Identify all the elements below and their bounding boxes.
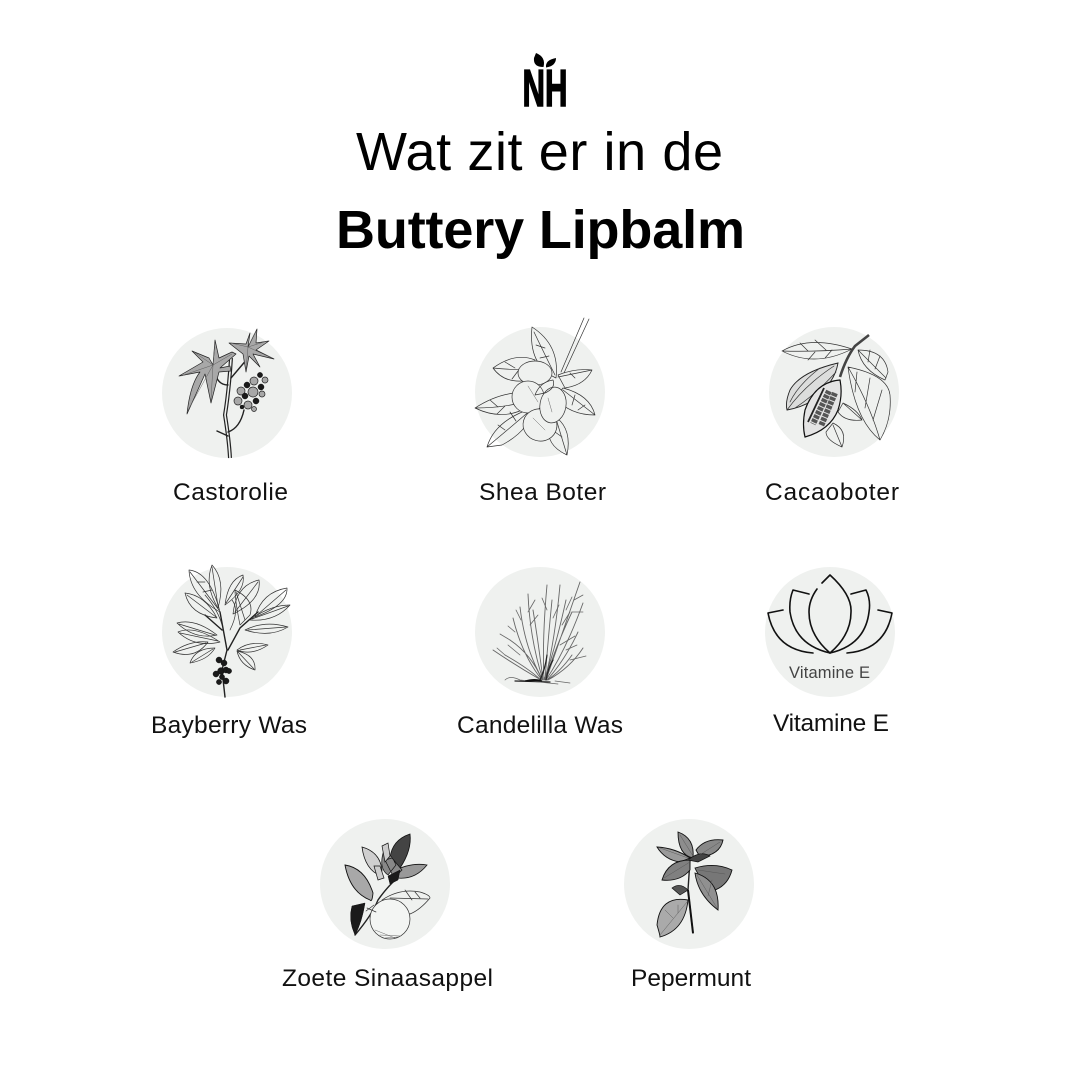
logo: NH with two leaves [522, 53, 568, 118]
title line 1: Wat zit er in de [356, 122, 723, 182]
ingredient: Shea Boter [475, 318, 606, 506]
label: Castorolie [173, 479, 288, 506]
icon: castor plant [179, 329, 274, 458]
ingredient: Castorolie [162, 328, 292, 506]
label: Pepermunt [631, 965, 751, 992]
logo: NH with two leaves: NH [522, 60, 568, 118]
ingredient: Vitamine E [765, 567, 895, 737]
berries [213, 657, 232, 685]
icon: candelilla shrub [493, 582, 586, 684]
icon: lotus [768, 575, 892, 653]
ingredient: Candelilla Was [457, 567, 623, 739]
ingredient: Zoete Sinaasappel [282, 819, 493, 992]
title line 2: Buttery Lipbalm [336, 200, 745, 260]
text inside icon: Vitamine E [789, 664, 870, 682]
icon: shea branch [475, 318, 595, 455]
label: Zoete Sinaasappel [282, 965, 493, 992]
icon: cacao branch [782, 335, 890, 447]
label: Bayberry Was [151, 712, 307, 739]
ingredient: Cacaoboter [765, 327, 899, 506]
fruit cluster [234, 372, 268, 412]
ingredient: Pepermunt [624, 819, 754, 992]
label: Candelilla Was [457, 712, 623, 739]
label: Cacaoboter [765, 479, 899, 506]
label: Shea Boter [479, 479, 606, 506]
ingredient: Bayberry Was [151, 565, 307, 739]
icon: orange branch [345, 834, 430, 939]
icon: bayberry branch [173, 565, 290, 697]
icon: peppermint [657, 832, 732, 937]
label: Vitamine E [773, 710, 889, 737]
